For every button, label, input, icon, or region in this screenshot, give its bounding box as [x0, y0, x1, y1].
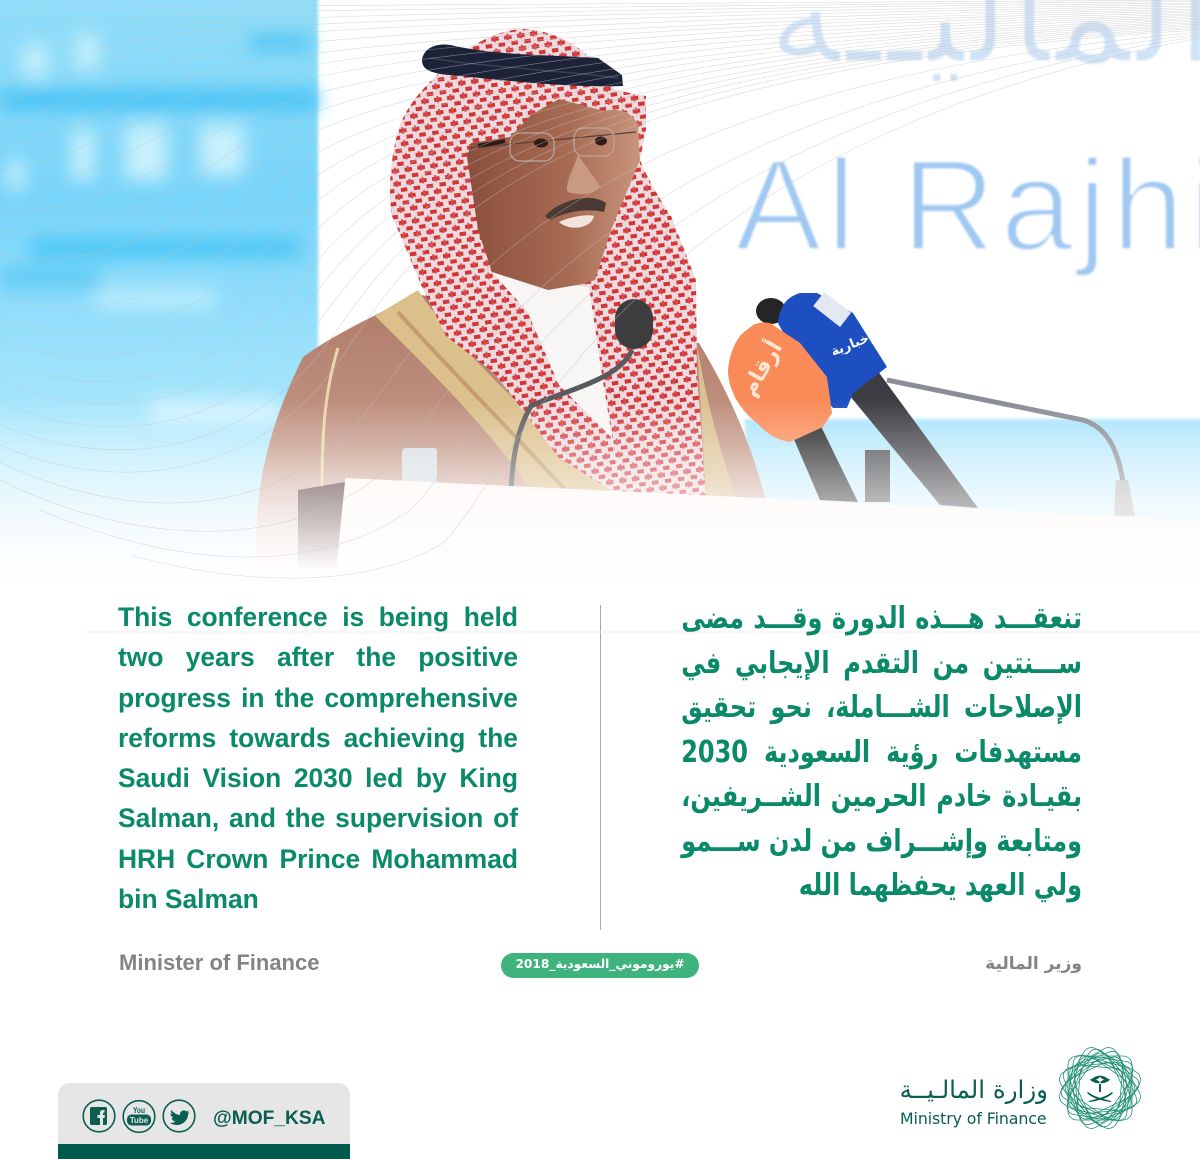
horizontal hairline	[85, 631, 1200, 633]
Arabic quote: تنعقـــد هـــذه الدورة وقـــد مضى	[681, 601, 1082, 636]
Arabic quote: الإصلاحات الشـــاملة، نحو تحقيق	[681, 690, 1082, 725]
gold trim	[375, 290, 625, 495]
agal	[422, 45, 623, 86]
orange mic	[728, 323, 832, 442]
Arabic quote: ومتابعة وإشـــراف من لدن ســـمو	[681, 824, 1082, 858]
glasses	[470, 128, 636, 161]
divider	[600, 605, 601, 930]
ministry logotype Arabic: وزارة المالـيــة	[900, 1075, 1048, 1104]
icon: facebook	[83, 1100, 115, 1132]
blurred blue backdrop, left	[0, 0, 318, 580]
icon: twitter	[163, 1100, 195, 1132]
hashtag pill: #يوروموني_السعودية_2018	[515, 957, 685, 971]
English quote	[118, 602, 518, 914]
centre microphone	[511, 299, 653, 490]
English quote: Saudi Vision 2030 led by King	[118, 763, 518, 793]
social icons	[82, 1099, 196, 1134]
icon: youtube	[123, 1101, 155, 1132]
icon: youtube: You	[133, 1106, 145, 1115]
English attribution: Minister of Finance	[119, 950, 319, 975]
speaker figure	[256, 29, 770, 575]
pale blue backdrop band, right	[745, 419, 1200, 534]
Arabic quote: بقيـادة خادم الحرمين الشــريفين،	[681, 779, 1082, 814]
Arabic quote: ســـنتين من التقدم الإيجابي في	[681, 646, 1082, 680]
English quote: reforms towards achieving the	[118, 723, 518, 753]
ministry emblem	[1059, 1047, 1141, 1129]
nose, moustache and mouth	[545, 155, 606, 228]
press microphones: أرقام	[733, 335, 788, 401]
contour line pattern	[0, 0, 1200, 578]
shirt	[490, 265, 622, 495]
hashtag pill	[501, 953, 699, 978]
English quote: progress in the comprehensive	[118, 683, 518, 713]
black foam	[756, 298, 786, 324]
robe	[256, 294, 770, 575]
English quote: This conference is being held	[118, 602, 518, 632]
English quote: two years after the positive	[118, 642, 518, 672]
green base strip	[58, 1144, 350, 1159]
water bottle	[402, 448, 437, 488]
white fade over lower photo	[0, 400, 1200, 580]
Arabic attribution: وزير المالية	[985, 954, 1082, 974]
English quote: Salman, and the supervision of	[118, 803, 518, 833]
English quote: HRH Crown Prince Mohammad	[118, 844, 518, 874]
right gooseneck	[887, 380, 1123, 482]
podium	[335, 478, 1200, 590]
Arabic quote: ولي العهد يحفظهما الله	[799, 868, 1082, 903]
orange mic handle	[787, 410, 858, 502]
ministry logotype English: Ministry of Finance	[900, 1109, 1046, 1128]
handle: @MOF_KSA	[213, 1108, 326, 1129]
palm and swords	[1087, 1075, 1113, 1102]
podium shadow block	[298, 482, 345, 570]
Arabic quote: مستهدفات رؤية السعودية 2030	[681, 734, 1082, 770]
English quote: bin Salman	[118, 884, 259, 914]
blue mic handle	[845, 370, 978, 508]
social media bar	[58, 1083, 350, 1159]
press microphones: الإخبارية	[829, 326, 885, 360]
headdress crown	[390, 29, 706, 500]
icon: youtube: Tube	[130, 1116, 149, 1125]
blue mic	[778, 293, 887, 408]
face	[467, 99, 640, 290]
press microphones	[728, 292, 1135, 516]
Arabic quote	[680, 601, 1082, 903]
